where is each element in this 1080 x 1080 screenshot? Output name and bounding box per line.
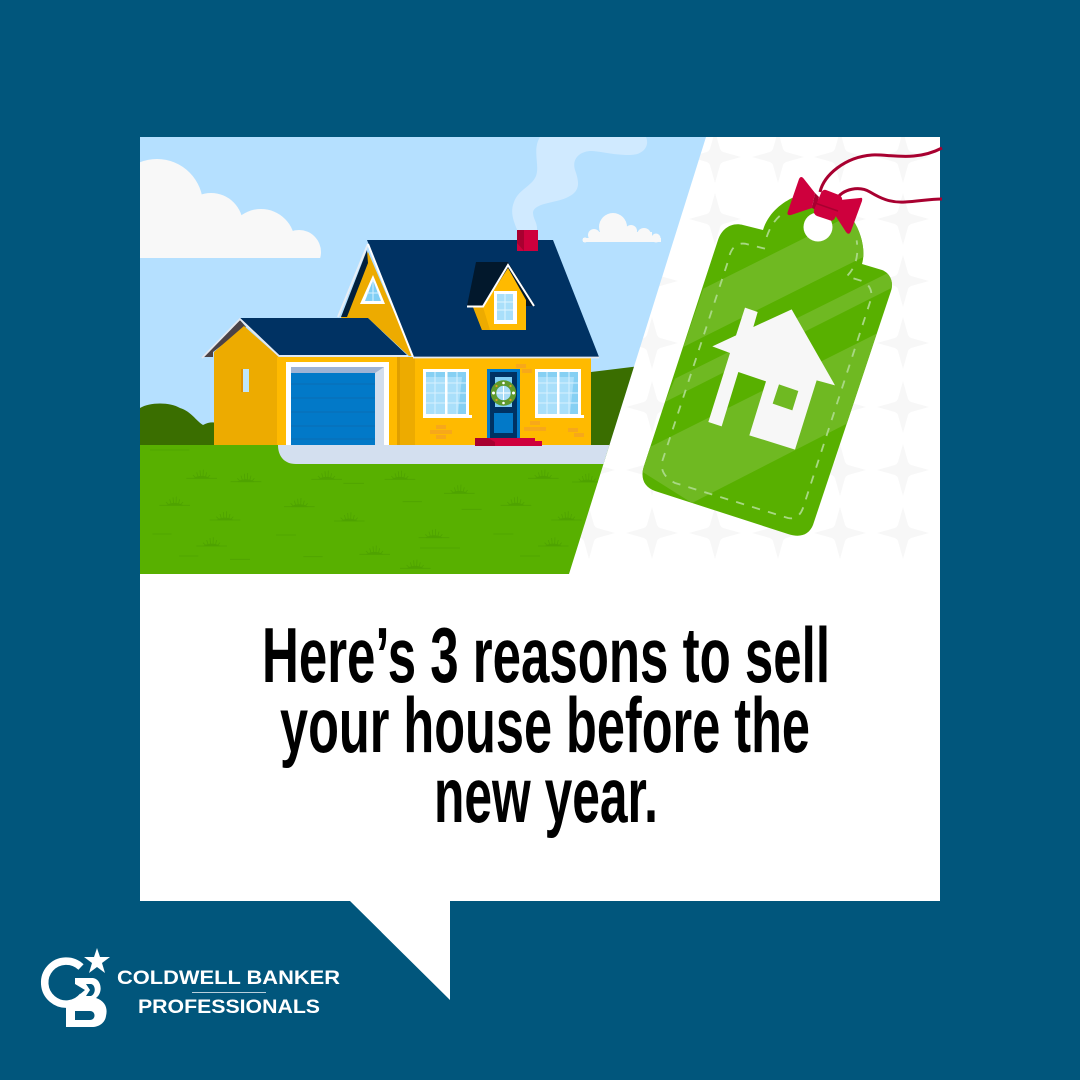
driveway [278,445,620,464]
dormer [467,262,535,330]
wall bricks [430,364,584,439]
headline line 2: your house before the [280,681,810,769]
house scene [111,137,710,575]
front steps [475,438,542,446]
chimney smoke [512,137,647,232]
large cloud [140,159,321,258]
main wall [415,357,591,445]
house [202,230,599,446]
side window [241,369,249,392]
star pattern background [563,131,929,559]
logo [45,948,340,1027]
gable right trim [368,244,413,357]
logo wordmark: COLDWELL BANKER [117,967,340,989]
price tag [640,148,942,536]
garage door [286,362,389,445]
hill [591,366,634,446]
gable dark strip [341,250,368,317]
gable trim [338,244,368,317]
left window [423,369,472,418]
headline [262,611,830,839]
lawn [140,445,610,574]
logo wordmark: PROFESSIONALS [138,997,320,1018]
main roof [367,240,599,357]
garage gable dark strip [202,320,246,357]
bow [787,177,862,234]
garage roof [240,318,407,355]
house icon on tag [708,308,835,450]
logo mark [45,948,110,1027]
speech bubble panel [140,137,940,1000]
small cloud [582,213,661,242]
tag hole [804,212,832,242]
bush [140,404,214,445]
headline line 3: new year. [434,751,658,839]
gable yellow fill [341,252,413,356]
corner pilaster [397,357,415,445]
infographic canvas [40,137,943,1027]
garage front wall [277,357,397,445]
front door [487,369,520,439]
garage side wall [214,326,279,445]
gable window [360,275,385,304]
tag stitching [662,214,872,518]
roof edge trim [202,319,599,358]
wreath [492,382,515,404]
chimney [517,230,538,251]
tag body [642,198,892,536]
right window [535,369,584,418]
logo wordmark [117,967,340,1018]
tag light bands [640,204,897,503]
sky [140,137,710,447]
string [820,148,942,202]
